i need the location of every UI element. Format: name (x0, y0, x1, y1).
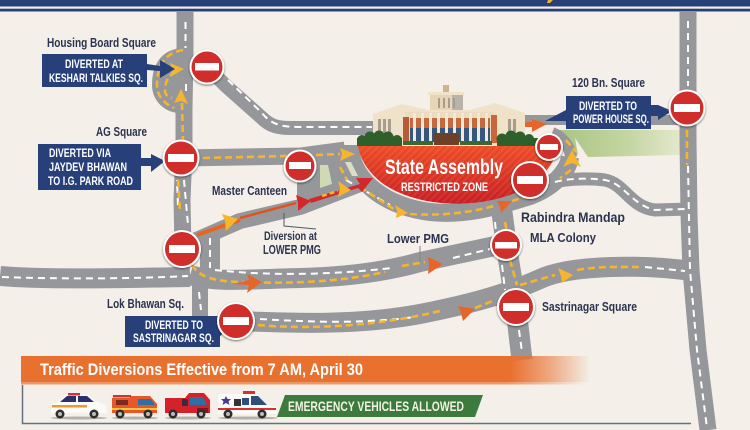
emergency vehicles tag (277, 395, 483, 417)
location labels: Rabindra Mandap (521, 209, 625, 225)
callout: Lok Bhawan Sq.: DIVERTED TO (145, 318, 203, 332)
arrow: yellow to Assembly (340, 148, 355, 161)
icon: police car (51, 393, 107, 420)
arrow: ring orange (497, 201, 512, 213)
icon: red fire truck (165, 393, 211, 420)
callout: Lok Bhawan Sq.: SASTRINAGAR SQ. (133, 331, 214, 345)
state assembly building (357, 85, 539, 146)
callout: AG Square: DIVERTED VIA (49, 146, 111, 160)
sign: Master Canteen (284, 150, 316, 182)
sign: diagonal (163, 230, 201, 268)
sign: 120 Bn (668, 90, 706, 126)
callout: 120 Bn. Square (545, 96, 672, 129)
callout: AG Square (38, 144, 165, 190)
arrow: Lower PMG orange (428, 257, 443, 274)
arrow: orange at assembly right (525, 119, 547, 132)
sign: Sastrinagar (497, 288, 535, 326)
location labels: MLA Colony (530, 230, 597, 245)
callout: 120 Bn. Square: POWER HOUSE SQ. (573, 112, 649, 126)
sign: MLA Colony (490, 229, 522, 261)
location labels: Housing Board Square (47, 35, 156, 50)
callout: AG Square: TO I.G. PARK ROAD (48, 174, 133, 188)
arrow: yellow north (174, 89, 188, 104)
sign: assembly large (511, 161, 549, 199)
sign: Lok Bhawan (217, 302, 255, 340)
location labels: AG Square (96, 124, 147, 139)
icon: fire engine orange (112, 395, 158, 420)
arrow: yellow Housing Board (170, 63, 184, 77)
no-entry signs (162, 50, 706, 340)
callout: AG Square: JAYDEV BHAWAN (49, 160, 127, 174)
location labels (47, 35, 645, 314)
banner: Traffic Diversions Effective from 7 AM, April 30 (40, 360, 363, 379)
zone title: State Assembly (385, 156, 503, 179)
leader lines (284, 213, 420, 262)
location labels: Master Canteen (212, 183, 287, 198)
callout: Housing Board Square: KESHARI TALKIES SQ. (49, 71, 143, 85)
location labels: Lok Bhawan Sq. (107, 296, 184, 311)
arrow: diagonal diversion (197, 178, 373, 235)
callout: Lok Bhawan Sq. (125, 316, 227, 347)
restricted zone (358, 146, 555, 204)
location labels: Lower PMG (387, 231, 449, 246)
sign: Housing Board (190, 50, 224, 84)
arrow: ring yellow (395, 205, 408, 218)
callout: Housing Board Square: DIVERTED AT (65, 57, 123, 71)
banner (21, 356, 591, 384)
sign: assembly small (535, 133, 563, 161)
arrow: right ring yellow (563, 150, 581, 167)
location labels: Diversion at (264, 229, 317, 243)
vehicles panel frame (22, 385, 691, 424)
tower (430, 95, 463, 110)
green area (555, 130, 680, 157)
arrow: Sastrinagar orange (458, 306, 475, 321)
arrow: Sastrinagar yellow (558, 268, 573, 283)
zone subtitle: RESTRICTED ZONE (401, 180, 488, 194)
location labels: 120 Bn. Square (572, 75, 645, 90)
emergency vehicles tag: EMERGENCY VEHICLES ALLOWED (288, 398, 464, 414)
route arrows (170, 63, 581, 321)
trees (357, 130, 539, 146)
facade columns (410, 118, 490, 128)
wings (373, 103, 525, 146)
sign: AG Square (162, 140, 200, 176)
gores (320, 165, 332, 188)
icon: ambulance (218, 391, 278, 420)
location labels: LOWER PMG (263, 242, 321, 257)
callout: 120 Bn. Square: DIVERTED TO (579, 99, 637, 113)
header band (0, 0, 750, 12)
callout: Housing Board Square (42, 54, 175, 87)
arrow: lower road orange (233, 274, 262, 293)
location labels: Sastrinagar Square (542, 299, 637, 314)
